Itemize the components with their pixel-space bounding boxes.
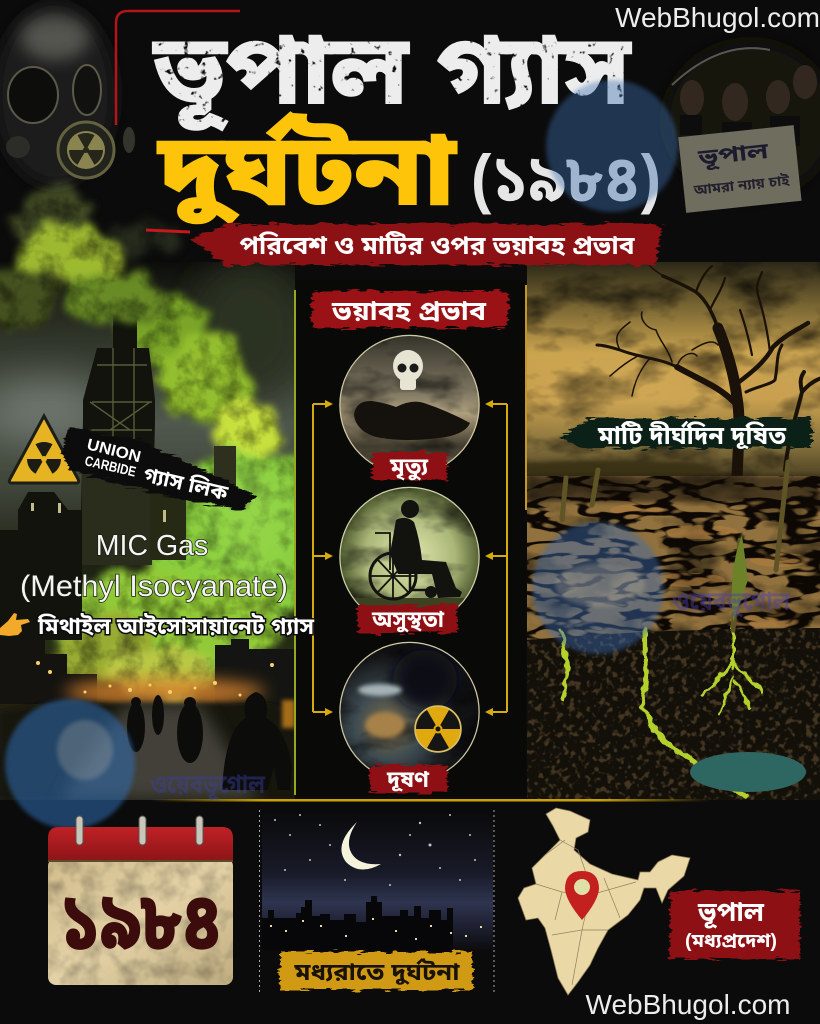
watermark captions: ওয়েবভূগোল bbox=[672, 586, 790, 618]
smoke plume lower bbox=[50, 288, 294, 705]
india map bbox=[518, 808, 690, 995]
protest sign: ভূপাল bbox=[696, 138, 770, 172]
cracked ground bbox=[527, 476, 820, 641]
center heading: ভয়াবহ প্রভাব bbox=[331, 296, 487, 326]
gold divider bbox=[150, 799, 710, 802]
gas mask bbox=[0, 5, 135, 185]
center heading bbox=[312, 291, 508, 328]
label: pollution bbox=[370, 765, 447, 793]
green smoke under mask bbox=[0, 186, 175, 328]
protest sign bbox=[678, 125, 802, 213]
title line 2 yellow: দুর্ঘটনা bbox=[158, 112, 456, 225]
soil cross-section bbox=[527, 628, 820, 641]
midnight banner bbox=[280, 952, 473, 990]
title frame bbox=[116, 11, 240, 232]
icon: radiation bbox=[415, 706, 461, 752]
Bhopal banner bbox=[670, 891, 800, 959]
icon: location pin bbox=[565, 871, 599, 920]
Bhopal banner: (মধ্যপ্রদেশ) bbox=[685, 931, 777, 952]
icon: wheelchair user bbox=[370, 500, 462, 599]
panel: central dark column bbox=[294, 280, 527, 796]
label: illness: অসুস্থতা bbox=[371, 606, 444, 633]
text: MIC Gas: MIC Gas bbox=[96, 530, 208, 562]
subtitle banner: পরিবেশ ও মাটির ওপর ভয়াবহ প্রভাব bbox=[240, 231, 635, 260]
banner: soil polluted bbox=[560, 418, 812, 450]
arrows bracket right bbox=[485, 400, 507, 716]
icon: skull bbox=[393, 350, 423, 390]
subtitle banner bbox=[190, 224, 662, 265]
icon: crescent moon bbox=[341, 822, 381, 870]
hazard sign bbox=[9, 416, 79, 483]
banner: Union Carbide bbox=[62, 428, 256, 510]
circle: death bbox=[340, 336, 480, 474]
label: death: মৃত্যু bbox=[389, 453, 429, 481]
banner: Union Carbide: UNION bbox=[85, 436, 143, 466]
panel: dead tree and poisoned soil bbox=[500, 262, 820, 800]
banner: soil polluted: মাটি দীর্ঘদিন দূষিত bbox=[597, 420, 786, 450]
calendar bbox=[48, 816, 233, 985]
factory tower bbox=[0, 303, 236, 640]
text: Methyl Isocyanate: (Methyl Isocyanate) bbox=[20, 570, 288, 603]
title year: (১৯৮৪) bbox=[471, 141, 661, 215]
green seepage and roots bbox=[560, 622, 762, 795]
label: pollution: দূষণ bbox=[386, 766, 430, 792]
tree bbox=[597, 262, 820, 480]
calendar: ১৯৮৪ bbox=[60, 877, 222, 965]
banner: Union Carbide: গ্যাস লিক bbox=[141, 462, 231, 505]
skyline bbox=[262, 896, 453, 952]
watermark captions: ওয়েবভূগোল bbox=[150, 769, 265, 801]
protest crowd photo bbox=[665, 42, 820, 198]
label: death bbox=[372, 452, 447, 481]
icon: pointing hand bbox=[0, 613, 30, 636]
title line 1: ভূপাল গ্যাস bbox=[153, 17, 631, 130]
banner: Union Carbide: CARBIDE bbox=[83, 452, 138, 480]
midnight banner: মধ্যরাতে দুর্ঘটনা bbox=[293, 958, 461, 986]
protest sign: আমরা ন্যায় চাই bbox=[692, 172, 790, 198]
night scene bbox=[262, 810, 493, 952]
city and crowd bbox=[0, 640, 97, 704]
circle: pollution bbox=[340, 643, 480, 781]
panel: factory and gas leak bbox=[0, 262, 295, 800]
arrows bracket left bbox=[313, 400, 333, 716]
text: Bengali gas name: মিথাইল আইসোসায়ানেট গ্যাস bbox=[37, 612, 315, 639]
watermark captions bbox=[150, 586, 790, 801]
watermark top: WebBhugol.com bbox=[615, 2, 820, 33]
dotted dividers bbox=[260, 810, 494, 995]
watermark circles bbox=[5, 80, 678, 829]
Bhopal banner: ভূপাল bbox=[697, 897, 765, 929]
circle: illness bbox=[339, 486, 480, 610]
watermark bottom: WebBhugol.com bbox=[586, 989, 790, 1020]
